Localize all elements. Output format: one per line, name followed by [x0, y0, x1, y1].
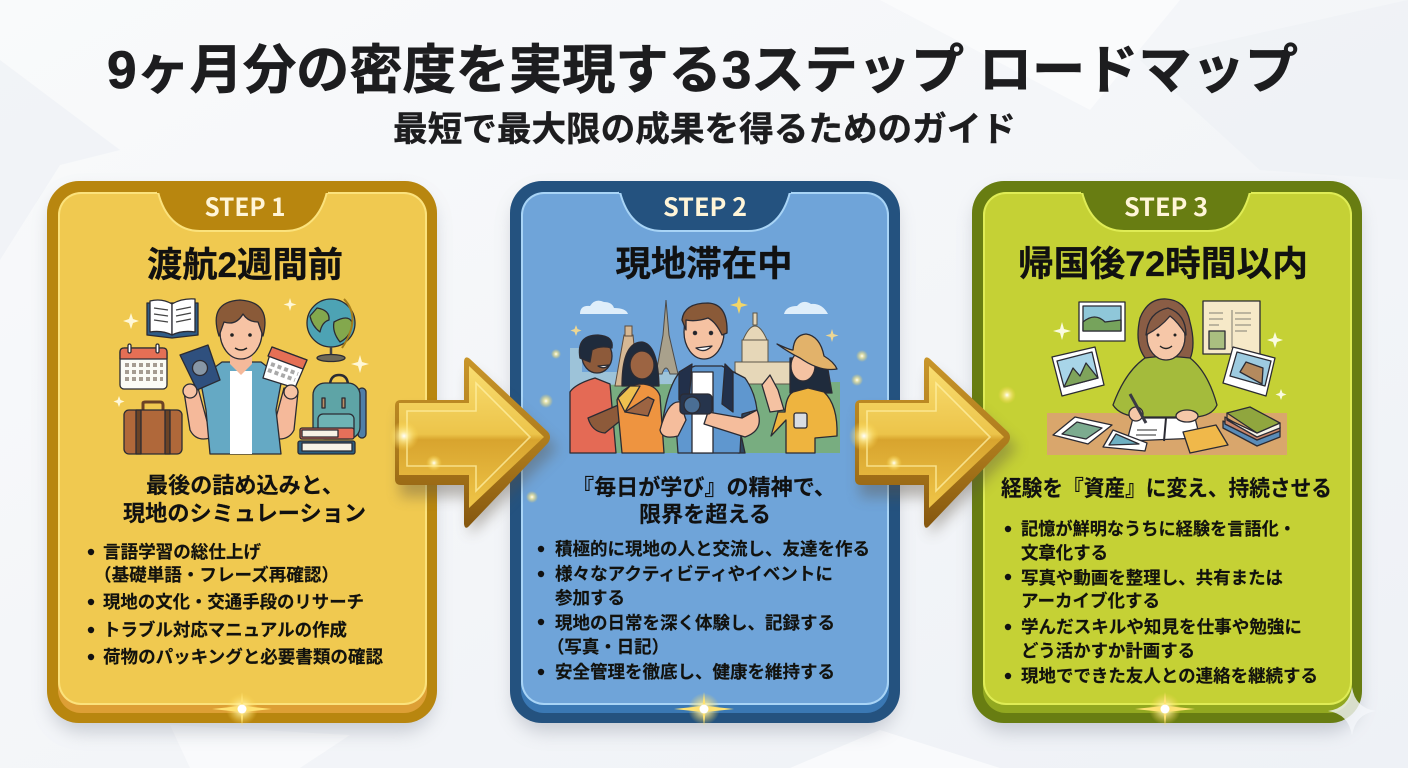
sparkle: step 1 bottom: [212, 692, 272, 726]
step 1 bullet list: 荷物のパッキングと必要書類の確認: [103, 647, 383, 667]
step 3 bullet list: どう活かすか計画する: [1021, 641, 1195, 661]
figure: man with camera: [660, 303, 759, 453]
step 2 bullet list: 様々なアクティビティやイベントに: [555, 564, 833, 584]
step 2 tab: STEP 2: [663, 188, 747, 224]
step 1 bullet list: 言語学習の総仕上げ: [103, 542, 262, 562]
icon: backpack: [313, 375, 366, 439]
step 2 subtitle: 『毎日が学び』の精神で、: [572, 475, 836, 500]
step 2 bullet list: 現地の日常を深く体験し、記録する: [555, 613, 835, 633]
sparkle: step 2 bottom: [674, 692, 734, 726]
landmark: tower: [615, 335, 638, 386]
step 3 bullet list: 文章化する: [1021, 543, 1108, 563]
arrow: step 2 to step 3: [849, 357, 1018, 535]
ground and sky scene: [570, 348, 840, 453]
step 3 heading: 帰国後72時間以内: [1018, 245, 1308, 284]
icon: stacked books: [298, 428, 355, 454]
landmark: capitol: [735, 313, 790, 384]
icon: tilted photo left: [1052, 347, 1104, 396]
figure: woman in sari: [617, 342, 664, 453]
step 2 bullet list: [538, 539, 870, 682]
step 3 bullet list: 現地でできた友人との連絡を継続する: [1021, 666, 1318, 686]
icon: yellow notebook: [1183, 425, 1228, 453]
step 3 bullet list: 記憶が鮮明なうちに経験を言語化・: [1021, 519, 1296, 539]
icon: hand-held calendar: [263, 347, 307, 388]
step 1 bullet list: トラブル対応マニュアルの作成: [103, 620, 347, 640]
step 3 bullet list: 学んだスキルや知見を仕事や勉強に: [1021, 617, 1302, 637]
illustration: travellers and landmarks: [526, 296, 868, 503]
step 2 subtitle: [572, 475, 836, 527]
landmark: Eiffel tower: [656, 300, 678, 374]
icon: corner sparkle: [1328, 687, 1376, 736]
step 2 tab: [619, 182, 791, 231]
clouds: [580, 301, 828, 314]
step 1 bullet list: （基礎単語・フレーズ再確認）: [94, 565, 339, 585]
panel: step 1: [47, 181, 437, 732]
icon: open notebook: [1127, 418, 1200, 441]
hands: [1129, 407, 1143, 421]
icon: tilted photo right: [1223, 347, 1275, 396]
icon: open book: [147, 299, 198, 338]
step 3 tab: [1081, 182, 1251, 231]
icon: table photos: [1053, 417, 1147, 451]
step 1 subtitle: [123, 473, 366, 526]
step 3 tab: STEP 3: [1124, 188, 1208, 224]
figure: woman with hat: [762, 334, 837, 453]
illustration: woman writing journal: [998, 299, 1287, 455]
figure: man in red shirt: [570, 335, 636, 453]
step 2 heading: 現地滞在中: [616, 245, 792, 284]
sparkles: [526, 296, 868, 503]
icon: suitcase: [124, 402, 182, 454]
icon: framed photo: [1079, 302, 1125, 341]
figure: woman: [1113, 299, 1217, 417]
step 1 bullet list: [88, 542, 383, 667]
sparkle: step 3 bottom: [1135, 692, 1195, 726]
step 3 bullet list: アーカイブ化する: [1021, 591, 1160, 611]
step 2 bullet list: 参加する: [555, 588, 625, 608]
sparkles: [1053, 322, 1286, 400]
icon: globe: [307, 299, 355, 362]
arrow: step 1 to step 2: [389, 357, 558, 535]
title: 9ヶ月分の密度を実現する3ステップ ロードマップ: [107, 41, 1298, 100]
figure: man with passport: [184, 300, 298, 454]
step 1 tab: [157, 182, 328, 231]
subtitle: 最短で最大限の成果を得るためのガイド: [393, 111, 1016, 149]
panel: step 3: [972, 181, 1362, 732]
icon: camera: [680, 394, 712, 414]
illustration: traveller preparing: [114, 298, 369, 454]
table: [1047, 413, 1287, 455]
step 3 subtitle: 経験を『資産』に変え、持続させる: [1001, 476, 1332, 501]
icon: pen: [1130, 394, 1146, 423]
step 1 bullet list: 現地の文化・交通手段のリサーチ: [103, 592, 364, 612]
step 3 bullet list: 写真や動画を整理し、共有または: [1021, 568, 1283, 588]
icon: passport: [180, 345, 220, 390]
icon: wall calendar: [120, 344, 167, 389]
step 2 bullet list: （写真・日記）: [547, 637, 669, 657]
step 2 bullet list: 積極的に現地の人と交流し、友達を作る: [555, 539, 870, 559]
step 2 bullet list: 安全管理を徹底し、健康を維持する: [555, 662, 835, 682]
step 2 subtitle: 限界を超える: [639, 502, 771, 527]
step 1 subtitle: 現地のシミュレーション: [123, 501, 366, 526]
icon: pinned notes board: [1203, 301, 1260, 354]
step 1 subtitle: 最後の詰め込みと、: [146, 473, 344, 498]
sparkles: [114, 298, 369, 407]
icon: stacked books: [1223, 407, 1280, 446]
panel: step 2: [510, 181, 900, 732]
step 1 tab: STEP 1: [204, 188, 286, 224]
step 3 bullet list: [1005, 519, 1318, 686]
step 1 heading: 渡航2週間前: [147, 246, 343, 285]
